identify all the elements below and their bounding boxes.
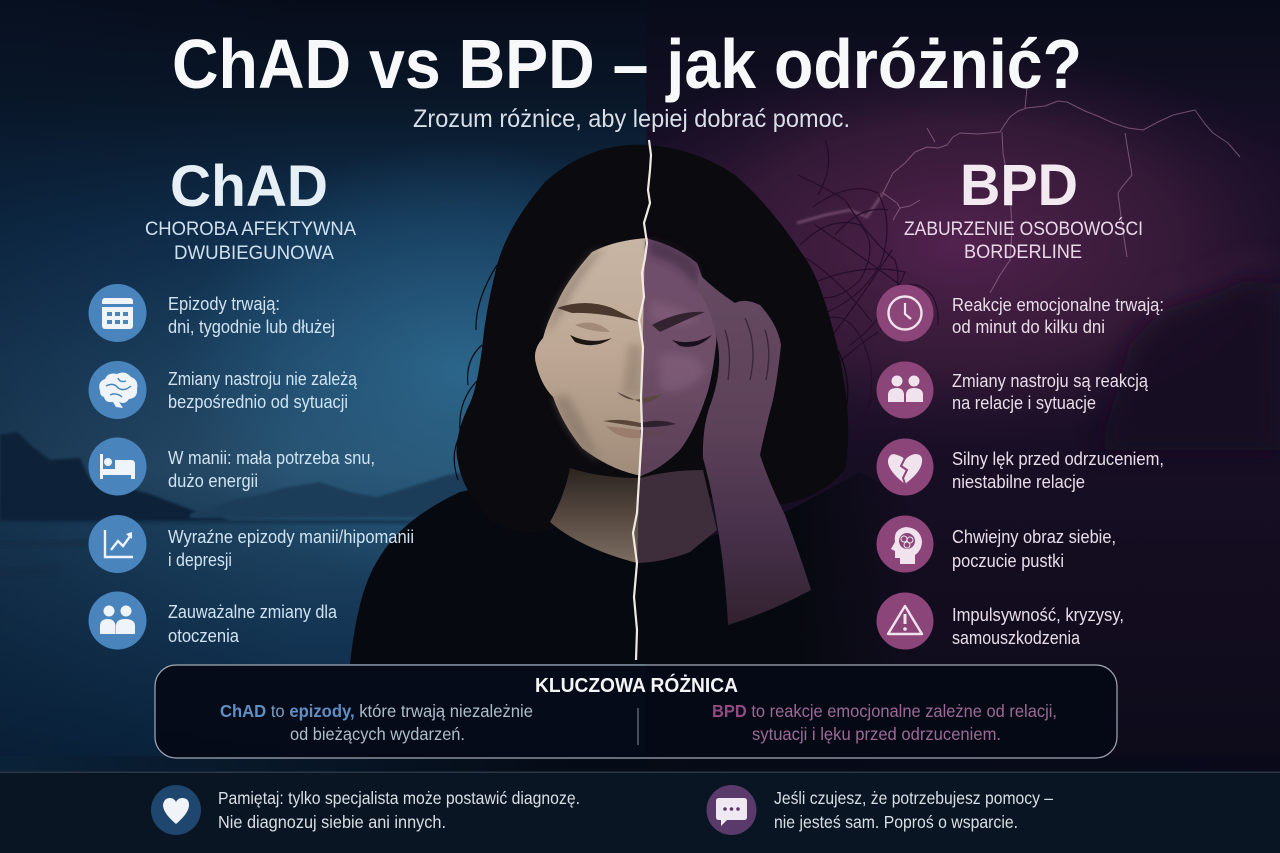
footer band bbox=[0, 772, 1280, 853]
icon: people bbox=[88, 592, 146, 650]
text: impulsivity: Impulsywność, kryzysy, bbox=[952, 605, 1124, 625]
strip below the callout bbox=[0, 756, 1280, 772]
text: mood reactions: Zmiany nastroju są reakcją bbox=[952, 371, 1149, 391]
footer note: ask for help: nie jesteś sam. Poproś o wsparcie. bbox=[774, 812, 1018, 832]
text: mood reactions bbox=[952, 371, 1149, 413]
callout heading: KLUCZOWA RÓŻNICA bbox=[535, 673, 738, 697]
text: distinct episodes bbox=[168, 527, 414, 570]
divider between the callout columns bbox=[638, 708, 639, 745]
text: impulsivity bbox=[952, 605, 1124, 648]
footer note: ask for help bbox=[774, 788, 1053, 832]
icon: broken heart bbox=[876, 438, 934, 496]
text: noticeable changes: Zauważalne zmiany dla bbox=[168, 602, 338, 622]
text: mania sleep: dużo energii bbox=[168, 471, 258, 491]
callout text: BPD: sytuacji i lęku przed odrzuceniem. bbox=[752, 724, 1001, 744]
subheading: BPD definition: ZABURZENIE OSOBOWOŚCI bbox=[904, 218, 1143, 240]
neck bbox=[550, 468, 640, 563]
text: fear of rejection bbox=[952, 449, 1164, 492]
text: fear of rejection: niestabilne relacje bbox=[952, 472, 1085, 492]
icon: clock bbox=[876, 284, 934, 342]
lightning bolts bbox=[883, 88, 1240, 293]
panel: ChAD column bbox=[88, 154, 414, 650]
text: self image bbox=[952, 527, 1116, 571]
text: noticeable changes bbox=[168, 602, 338, 646]
icon: line chart bbox=[88, 515, 146, 573]
subtitle: Zrozum różnice, aby lepiej dobrać pomoc. bbox=[413, 105, 850, 133]
icon: bed bbox=[88, 438, 146, 496]
tangled thorn lines bbox=[798, 140, 938, 440]
callout text: ChAD: ChAD to epizody, które trwają niezależnie bbox=[220, 701, 533, 721]
text: distinct episodes: i depresji bbox=[168, 550, 232, 570]
brows, eyes, nose and lips bbox=[557, 303, 712, 439]
callout text: ChAD bbox=[220, 701, 533, 744]
icon: warning triangle bbox=[876, 592, 934, 650]
footer note: specialist bbox=[218, 788, 580, 832]
subheading: BPD definition bbox=[904, 218, 1143, 263]
text: episodes duration bbox=[168, 294, 335, 337]
footer note: ask for help: Jeśli czujesz, że potrzebujesz pomocy – bbox=[774, 788, 1053, 808]
text: reaction duration: od minut do kilku dni bbox=[952, 317, 1105, 337]
text: mood reactions: na relacje i sytuacje bbox=[952, 393, 1096, 413]
heading: BPD: BPD bbox=[960, 153, 1078, 218]
text: self image: Chwiejny obraz siebie, bbox=[952, 527, 1116, 547]
right side of face bbox=[640, 238, 716, 476]
panel: BPD column bbox=[876, 153, 1164, 650]
shirt and shoulders bbox=[350, 472, 915, 664]
icon: people bbox=[876, 362, 934, 418]
mountains on the left bbox=[0, 432, 480, 576]
icon: head with tangled mind bbox=[876, 516, 934, 572]
footer note: specialist: Pamiętaj: tylko specjalista może postawić diagnozę. bbox=[218, 788, 580, 808]
text: self image: poczucie pustki bbox=[952, 551, 1064, 571]
text: mania sleep: W manii: mała potrzeba snu, bbox=[168, 448, 375, 468]
text: episodes duration: Epizody trwają: bbox=[168, 294, 280, 314]
text: noticeable changes: otoczenia bbox=[168, 626, 240, 646]
callout text: BPD: BPD to reakcje emocjonalne zależne od relacji, bbox=[712, 701, 1057, 721]
title: ChAD vs BPD – jak odróżnić? bbox=[172, 25, 1082, 103]
text: mood changes: Zmiany nastroju nie zależą bbox=[168, 369, 358, 389]
text: reaction duration bbox=[952, 295, 1164, 337]
footer note: specialist: Nie diagnozuj siebie ani innych. bbox=[218, 812, 446, 832]
subheading: ChAD definition bbox=[145, 219, 356, 264]
text: mood changes bbox=[168, 369, 358, 412]
text: distinct episodes: Wyraźne epizody manii/hipomanii bbox=[168, 527, 414, 547]
subheading: ChAD definition: DWUBIEGUNOWA bbox=[174, 243, 334, 264]
text: mania sleep bbox=[168, 448, 375, 491]
hair bbox=[456, 145, 848, 532]
heading: ChAD: ChAD bbox=[170, 154, 328, 219]
subheading: BPD definition: BORDERLINE bbox=[964, 242, 1082, 263]
storm cloud in the lower right bbox=[1100, 265, 1280, 450]
subheading: ChAD definition: CHOROBA AFEKTYWNA bbox=[145, 219, 356, 240]
callout: key difference bbox=[155, 665, 1117, 758]
callout text: ChAD: od bieżących wydarzeń. bbox=[290, 724, 465, 744]
text: impulsivity: samouszkodzenia bbox=[952, 628, 1081, 648]
icon: brain bbox=[88, 361, 146, 419]
callout text: BPD bbox=[712, 701, 1057, 744]
text: mood changes: bezpośrednio od sytuacji bbox=[168, 392, 348, 412]
left side of face bbox=[535, 238, 648, 476]
icon: heart bbox=[151, 785, 201, 835]
central portrait split by a crack bbox=[350, 140, 915, 664]
text: reaction duration: Reakcje emocjonalne trwają: bbox=[952, 295, 1164, 315]
icon: calendar bbox=[88, 284, 146, 342]
hand and arm on the right bbox=[698, 273, 811, 625]
text: fear of rejection: Silny lęk przed odrzuceniem, bbox=[952, 449, 1164, 469]
torn crack line bbox=[633, 140, 651, 660]
icon: speech bubble bbox=[706, 785, 756, 835]
text: episodes duration: dni, tygodnie lub dłużej bbox=[168, 317, 335, 337]
